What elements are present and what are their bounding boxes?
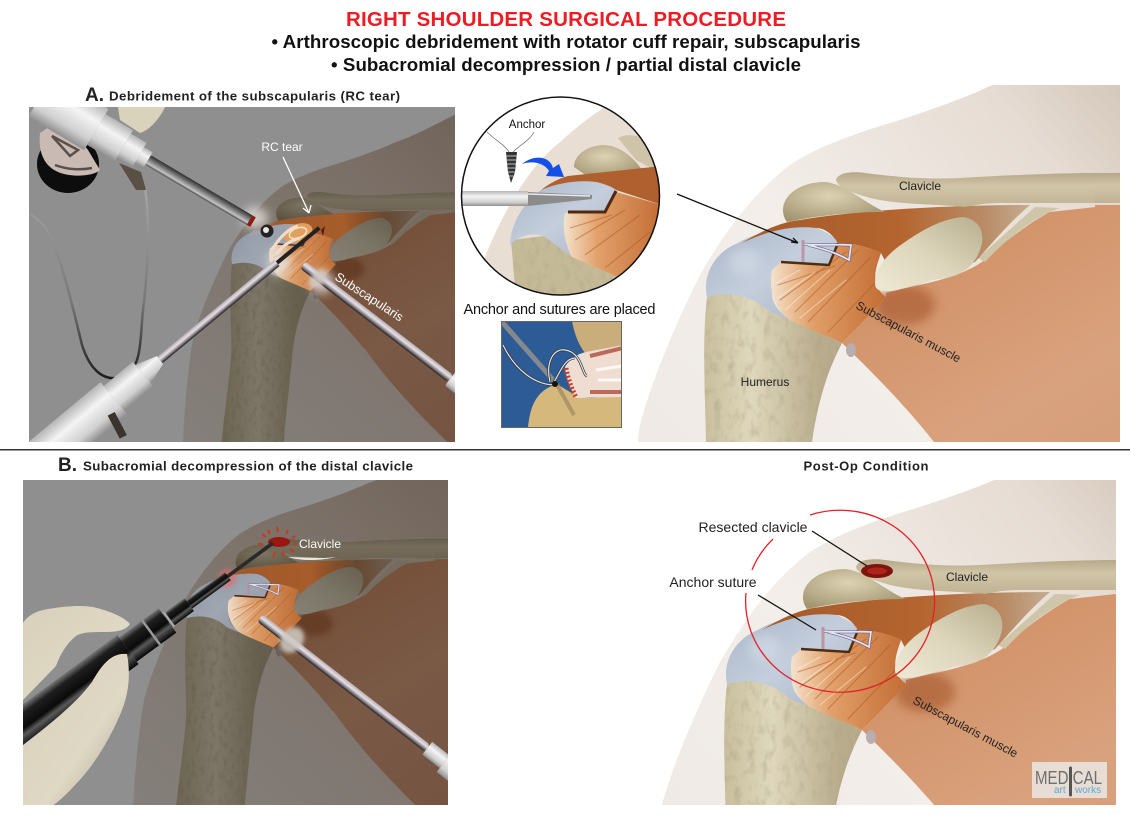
surgical hazes around portals	[242, 207, 333, 294]
anchor suture	[803, 240, 851, 262]
label: Anchor: Anchor	[509, 119, 545, 131]
lower finger	[23, 654, 129, 806]
leader: Anchor suture	[758, 595, 816, 630]
heading: section B: Subacromial decompression of the distal clavicle	[83, 458, 413, 474]
torn tendon area	[272, 219, 325, 254]
resected clavicle burr site	[258, 527, 297, 557]
logo: Medical Art Works	[1032, 762, 1107, 798]
title	[272, 8, 860, 75]
label: Humerus: Humerus	[741, 375, 789, 389]
label: Clavicle: Clavicle	[946, 570, 988, 584]
inset: anchor placement circle	[462, 95, 670, 300]
pale gap under clavicle	[288, 557, 336, 560]
arrow: inset to anchor	[677, 194, 798, 243]
label: Subscapularis muscle: Subscapularis muscle	[911, 693, 1021, 761]
chrome ball	[260, 224, 274, 238]
heading: section B	[58, 455, 413, 476]
panel: subacromial decompression	[23, 480, 448, 805]
haze ring over right instrument	[308, 268, 328, 290]
title: RIGHT SHOULDER SURGICAL PROCEDURE	[346, 8, 786, 31]
inset: suture detail	[501, 321, 623, 428]
camera hand and head	[37, 107, 165, 193]
shoulder anatomy, dimmed	[134, 480, 448, 805]
logo: Medical Art Works: art	[1054, 785, 1066, 796]
title: • Subacromial decompression / partial distal clavicle	[331, 54, 801, 75]
label: Clavicle: Clavicle	[899, 179, 941, 193]
arthroscope	[30, 107, 256, 227]
heading: section A	[85, 85, 400, 106]
panel: repaired shoulder anatomy	[638, 85, 1120, 442]
label: Clavicle: Clavicle	[299, 537, 341, 551]
blue arrow	[522, 158, 564, 177]
heading: post-op condition: Post-Op Condition	[804, 458, 929, 474]
haze around portal	[277, 624, 307, 656]
logo: Medical Art Works: works	[1074, 785, 1101, 796]
label: RC tear: RC tear	[261, 140, 303, 154]
logo: Medical Art Works: MEDICAL	[1035, 768, 1102, 788]
label: Anchor suture: Anchor suture	[669, 574, 757, 590]
lower instrument	[29, 226, 320, 442]
heading: section A: A.	[85, 85, 104, 106]
shoulder anatomy, dimmed	[183, 114, 455, 442]
caption: anchor and sutures: Anchor and sutures are placed	[464, 302, 656, 318]
heading: section A: Debridement of the subscapularis (RC tear)	[109, 88, 400, 104]
cable	[31, 188, 148, 378]
inserter tool	[462, 191, 592, 206]
right instrument	[302, 262, 455, 394]
upper thumb	[23, 606, 130, 700]
anchor suture threads	[487, 132, 534, 152]
divider	[0, 449, 1130, 450]
resected clavicle end	[861, 564, 893, 578]
panel: debridement of the subscapularis	[29, 107, 455, 442]
red glow at portal	[218, 569, 236, 587]
label: Subscapularis muscle: Subscapularis muscle	[854, 298, 964, 366]
right instrument	[258, 616, 448, 781]
panel: post-op condition	[662, 480, 1116, 805]
shoulder anatomy	[662, 480, 1116, 805]
heading: section B: B.	[58, 455, 77, 476]
red highlight circle	[746, 510, 935, 692]
arrow: RC tear	[283, 157, 311, 213]
label: Resected clavicle: Resected clavicle	[699, 519, 808, 535]
leader: Resected clavicle	[812, 531, 867, 566]
anchor screw	[506, 152, 517, 183]
label: Subscapularis: Subscapularis	[332, 270, 406, 324]
title: • Arthroscopic debridement with rotator cuff repair, subscapularis	[272, 31, 860, 52]
shaver handpiece	[23, 542, 274, 745]
shoulder anatomy	[704, 172, 1096, 442]
